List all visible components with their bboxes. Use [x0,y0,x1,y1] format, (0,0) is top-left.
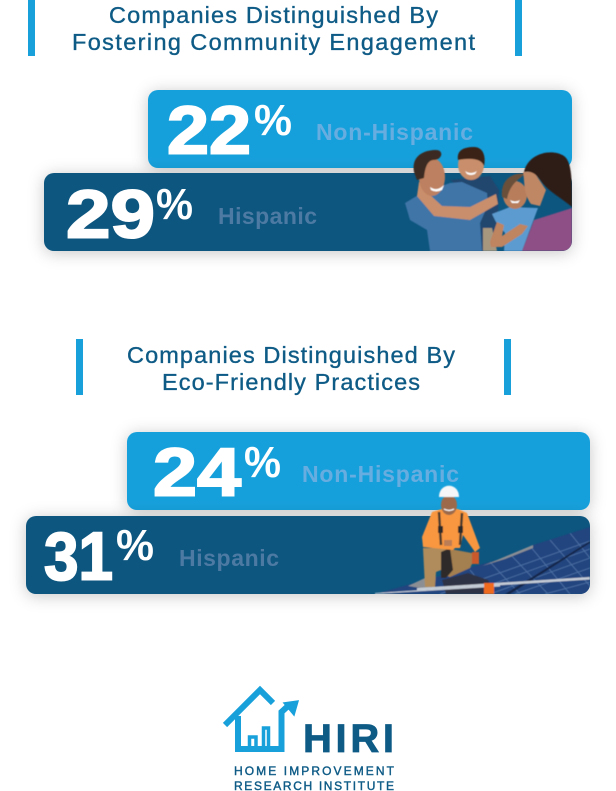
bar: Hispanic 31%: % [116,521,154,570]
wordmark: HIRI: HIRI [303,717,394,761]
photo: smiling family [405,147,572,251]
heading text: eco-friendly [127,342,455,395]
heading text: community engagement: Companies Distinguished By [109,2,438,28]
panel: community engagement heading [28,0,522,56]
bar: Hispanic 29%: Hispanic [218,203,317,229]
panel: eco-friendly bars [26,432,590,594]
heading text: eco-friendly: Eco-Friendly Practices [162,369,420,395]
logo: Home Improvement Research Institute [225,690,395,791]
bar: Hispanic 31% [26,516,590,594]
bar: Hispanic 29% [44,173,572,252]
bar: Hispanic 31%: Hispanic [179,545,279,571]
heading text: community engagement: Fostering Community Engagement [72,29,475,55]
bar: Hispanic 29%: % [156,180,193,229]
bar: non-Hispanic 24%: % [244,438,281,487]
bar: non-Hispanic 24%: Non-Hispanic [302,461,459,487]
photo: solar panels and worker [375,486,590,594]
bar: non-Hispanic 24% [127,432,590,510]
tagline: HOME IMPROVEMENT [234,764,395,778]
panel: community engagement bars [44,90,572,252]
bar: Hispanic 29%: 29 [66,176,155,252]
heading text: eco-friendly: Companies Distinguished By [127,342,455,368]
bar: Hispanic 31%: 31 [44,518,113,594]
bar: non-Hispanic 22%: % [254,96,292,145]
bar: non-Hispanic 24%: 24 [153,434,241,510]
bar: non-Hispanic 22% [148,90,572,168]
tagline [234,764,395,791]
icon: house with rising arrow [225,690,298,749]
bar: non-Hispanic 22%: Non-Hispanic [316,119,473,145]
heading text: community engagement [72,2,475,55]
bar: non-Hispanic 22%: 22 [167,92,251,168]
panel: eco-friendly heading [76,339,511,395]
